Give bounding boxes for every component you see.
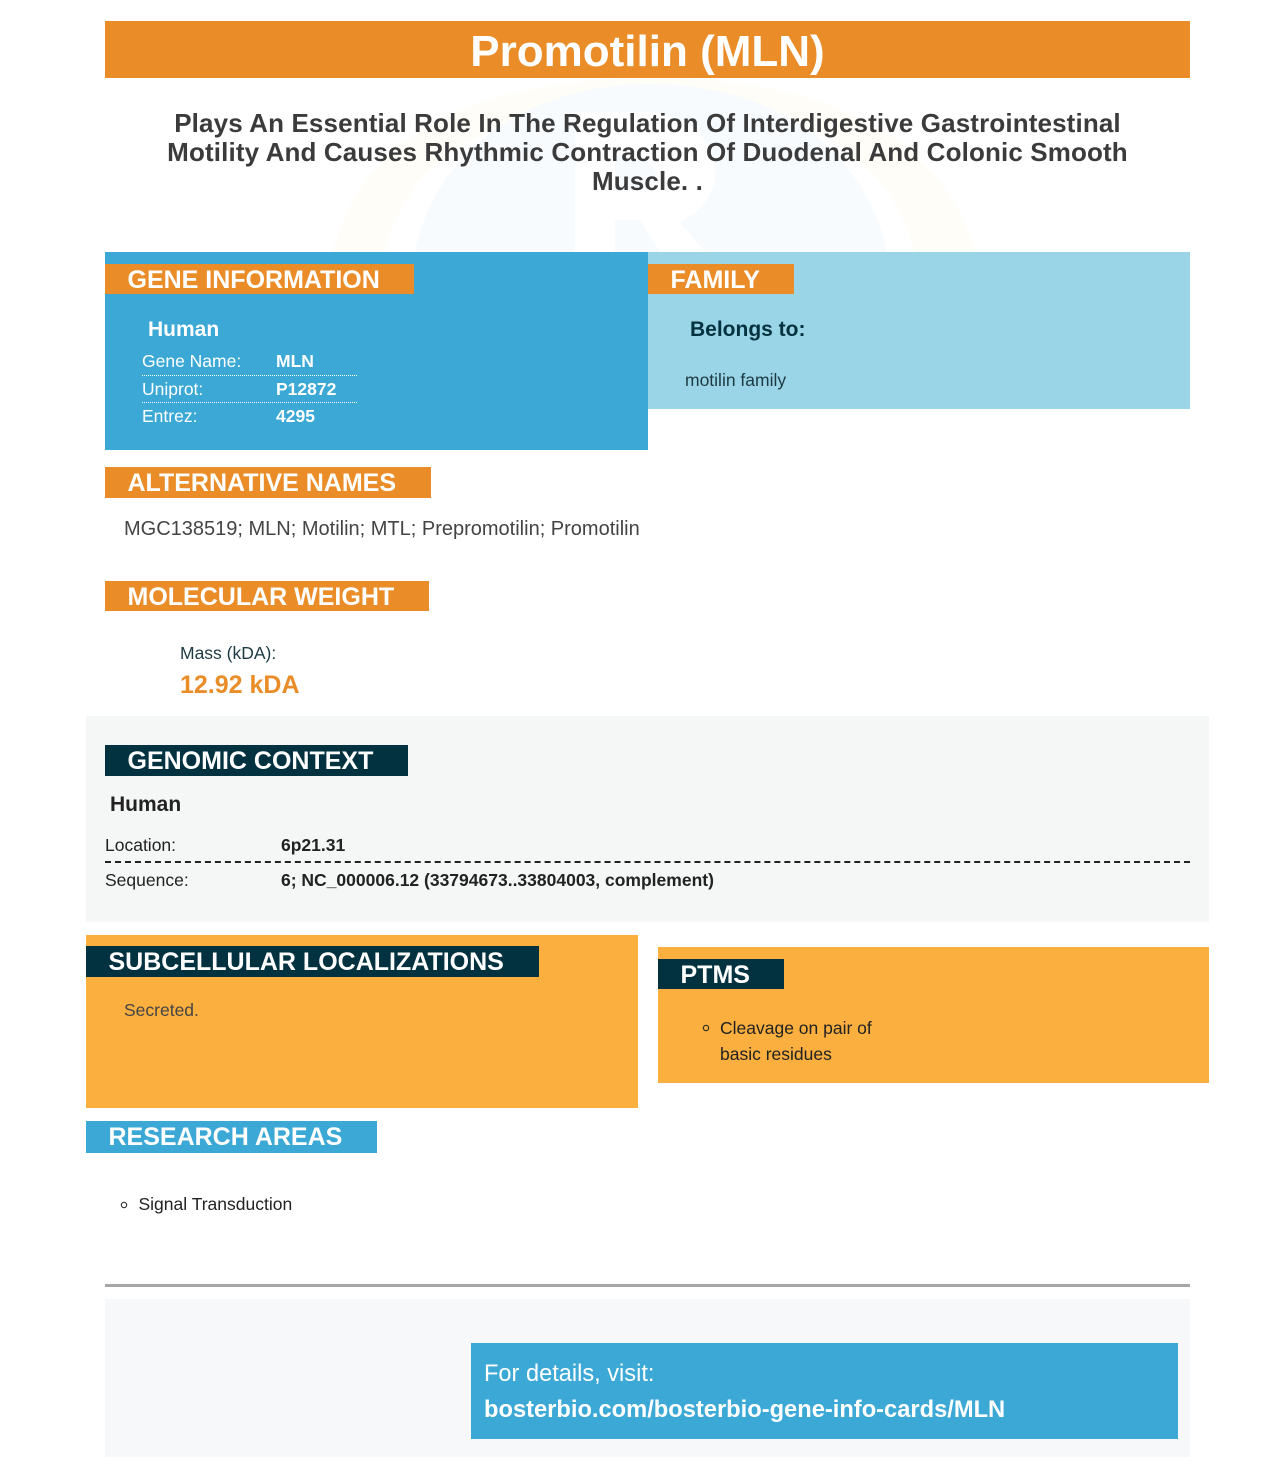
localization text: Secreted. <box>124 1000 199 1020</box>
watermark logo <box>0 0 1288 260</box>
panel: ptms <box>658 947 1209 1083</box>
panel: subcellular localizations <box>86 935 638 1108</box>
url: bosterbio.com/bosterbio-gene-info-cards/MLN <box>484 1397 1005 1423</box>
panel: family <box>648 252 1190 409</box>
heading: subcellular localizations: SUBCELLULAR LOCALIZATIONS <box>108 948 504 976</box>
heading: gene information: GENE INFORMATION <box>128 266 380 294</box>
species label: Human <box>148 318 219 341</box>
uniprot row <box>142 376 357 403</box>
entrez row <box>142 406 315 426</box>
ptm list item <box>702 1018 872 1064</box>
mass value: 12.92 kDA <box>180 671 300 699</box>
alternative names text: MGC138519; MLN; Motilin; MTL; Prepromotilin; Promotilin <box>124 518 640 540</box>
callout: details link <box>471 1343 1178 1439</box>
visit label: For details, visit: <box>484 1361 654 1387</box>
location row <box>105 832 1190 863</box>
location row: 6p21.31 <box>281 835 345 855</box>
research areas list item: Signal Transduction <box>138 1194 292 1214</box>
belongs to label: Belongs to: <box>690 318 806 341</box>
gene name row: Gene Name: <box>142 351 241 371</box>
heading: ptms: PTMS <box>680 961 750 989</box>
mass label: Mass (kDA): <box>180 643 276 663</box>
entrez row: Entrez: <box>142 406 197 426</box>
family text: motilin family <box>685 370 786 390</box>
heading: family <box>648 264 794 294</box>
sequence row: 6; NC_000006.12 (33794673..33804003, complement) <box>281 870 714 890</box>
panel: footer <box>105 1299 1190 1457</box>
gene name row <box>142 347 357 376</box>
heading: family: FAMILY <box>670 266 760 294</box>
heading: ptms <box>658 959 784 989</box>
heading: molecular weight: MOLECULAR WEIGHT <box>128 583 394 611</box>
ptm list item: Cleavage on pair of <box>720 1018 872 1038</box>
uniprot row: P12872 <box>276 379 336 399</box>
heading: alternative names: ALTERNATIVE NAMES <box>128 469 396 497</box>
location row: Location: <box>105 835 176 855</box>
title banner: Promotilin (MLN) <box>470 27 825 76</box>
uniprot row: Uniprot: <box>142 379 203 399</box>
entrez row: 4295 <box>276 406 315 426</box>
gene name row: MLN <box>276 351 314 371</box>
summary text: Plays An Essential Role In The Regulation Of Interdigestive Gastrointestinal Motility And Causes Rhythmic Contraction Of Duodenal And Colonic Smooth Muscle. . <box>167 108 1128 196</box>
panel: genomic context <box>86 716 1209 922</box>
species label: Human <box>110 793 181 816</box>
sequence row: Sequence: <box>105 870 189 890</box>
heading: research areas: RESEARCH AREAS <box>108 1123 342 1151</box>
heading: genomic context: GENOMIC CONTEXT <box>128 747 373 775</box>
ptm list item: basic residues <box>720 1044 832 1064</box>
title banner <box>105 21 1190 78</box>
footer rule <box>105 1284 1190 1287</box>
panel: gene information <box>105 252 648 450</box>
